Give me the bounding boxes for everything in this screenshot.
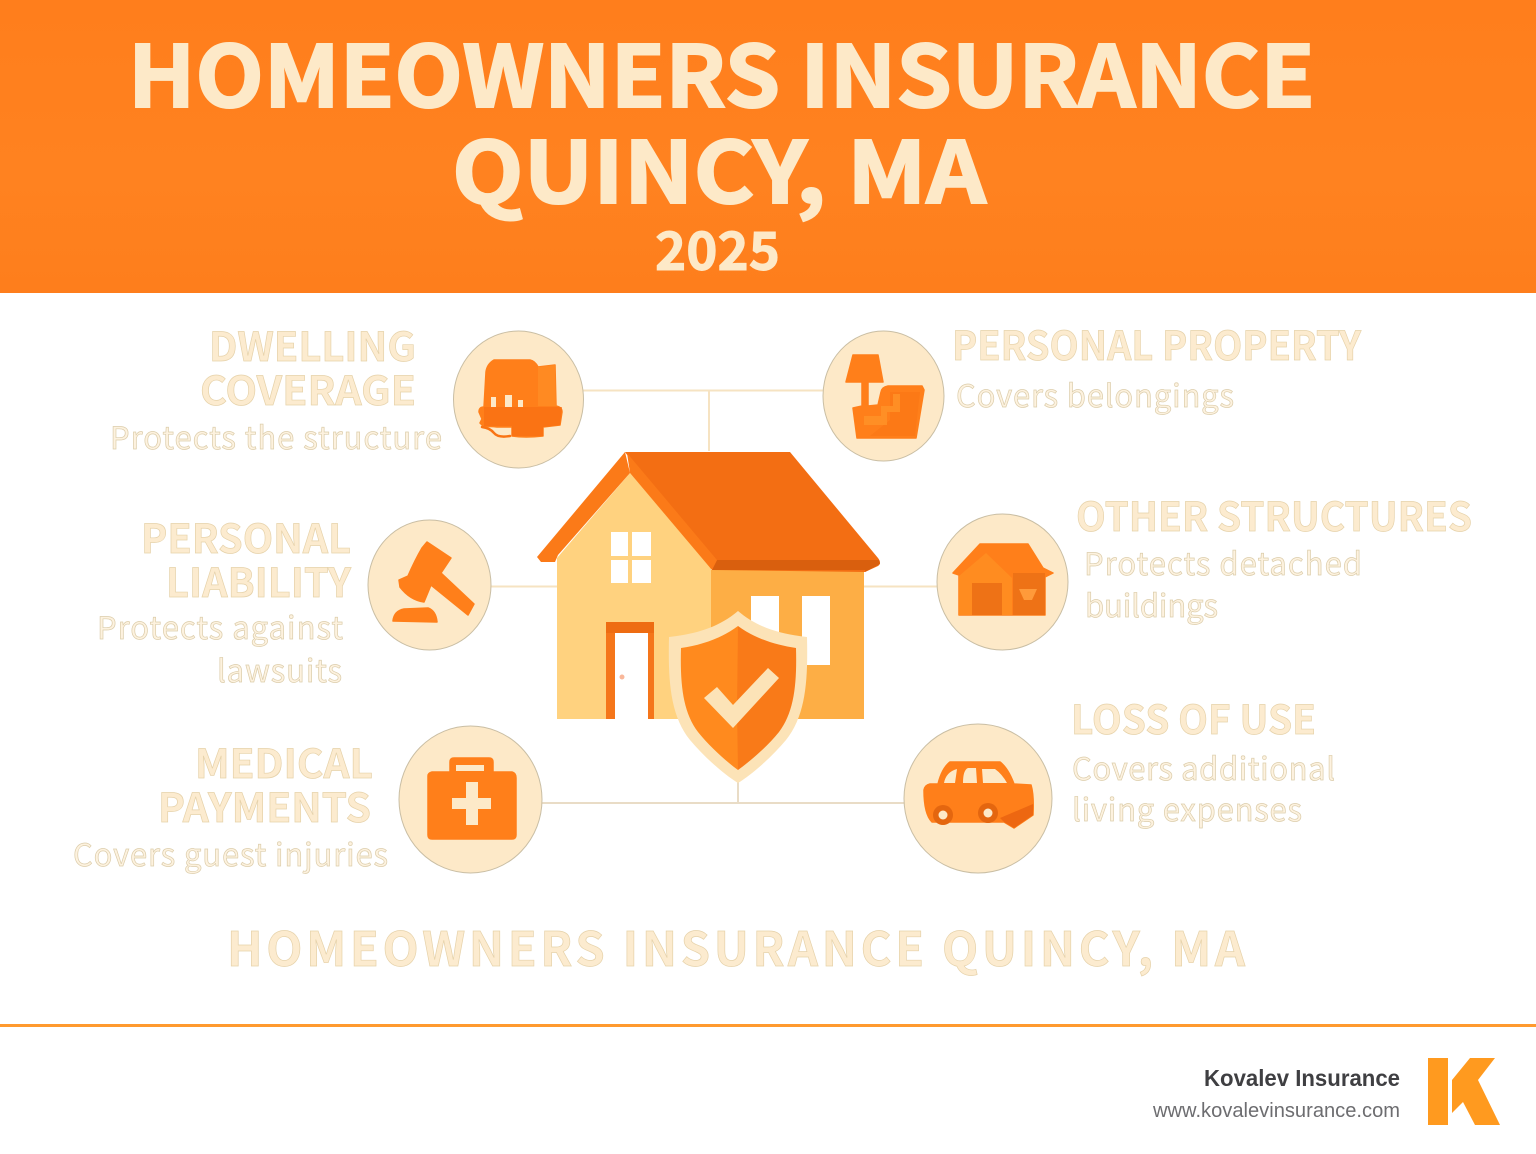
label: personal property bbox=[952, 314, 1362, 416]
house right wall bbox=[711, 570, 864, 719]
label: loss of use: LOSS OF USE bbox=[1071, 688, 1316, 746]
label: personal property: PERSONAL PROPERTY bbox=[952, 314, 1362, 372]
footer brand text bbox=[1152, 1065, 1400, 1122]
label: medical payments: MEDICAL bbox=[195, 732, 373, 790]
label: medical payments: Covers guest injuries bbox=[73, 830, 388, 875]
label: loss of use: living expenses bbox=[1072, 785, 1302, 830]
label: other structures: Protects detached bbox=[1084, 539, 1362, 584]
title line 1: HOMEOWNERS INSURANCE bbox=[128, 9, 1315, 132]
label: medical payments: PAYMENTS bbox=[158, 776, 371, 834]
connector lines bbox=[491, 390, 937, 803]
shield with check bbox=[669, 611, 807, 783]
label: loss of use bbox=[1071, 688, 1335, 830]
header banner bbox=[0, 0, 1536, 293]
label: personal liability bbox=[97, 507, 352, 691]
gable window bbox=[611, 532, 651, 583]
icon: car circle bbox=[904, 724, 1052, 873]
label: dwelling coverage: Protects the structure bbox=[110, 413, 442, 458]
icon: first aid kit circle bbox=[399, 726, 542, 873]
label: loss of use: Covers additional bbox=[1072, 744, 1335, 789]
label: personal liability: lawsuits bbox=[217, 646, 342, 691]
label: dwelling coverage bbox=[110, 315, 442, 458]
bottom caption: HOMEOWNERS INSURANCE QUINCY, MA bbox=[227, 911, 1246, 980]
side windows bbox=[751, 596, 830, 665]
title line 2: QUINCY, MA bbox=[452, 105, 987, 228]
house left wall bbox=[557, 473, 711, 719]
icon: gavel circle bbox=[368, 520, 491, 650]
icon: detached building circle bbox=[937, 514, 1068, 650]
label: personal property: Covers belongings bbox=[956, 371, 1234, 416]
year: 2025 bbox=[655, 210, 780, 286]
label: dwelling coverage: COVERAGE bbox=[200, 359, 416, 417]
label: personal liability: PERSONAL bbox=[141, 507, 351, 565]
icon: lamp and armchair circle bbox=[823, 331, 944, 461]
label: dwelling coverage: DWELLING bbox=[209, 315, 416, 373]
footer brand text: Kovalev Insurance bbox=[1204, 1065, 1400, 1091]
icon: dwelling circle bbox=[454, 331, 584, 468]
roof bbox=[625, 452, 880, 572]
door bbox=[606, 622, 654, 719]
icon: K logo bbox=[1428, 1058, 1500, 1125]
central house illustration bbox=[537, 452, 880, 783]
footer rule bbox=[0, 1024, 1536, 1027]
label: other structures bbox=[1076, 485, 1472, 626]
label: personal liability: Protects against bbox=[97, 603, 343, 648]
label: personal liability: LIABILITY bbox=[166, 551, 352, 609]
label: other structures: OTHER STRUCTURES bbox=[1076, 485, 1472, 543]
footer brand text: www.kovalevinsurance.com bbox=[1152, 1100, 1400, 1122]
label: other structures: buildings bbox=[1085, 581, 1218, 626]
label: medical payments bbox=[73, 732, 388, 875]
